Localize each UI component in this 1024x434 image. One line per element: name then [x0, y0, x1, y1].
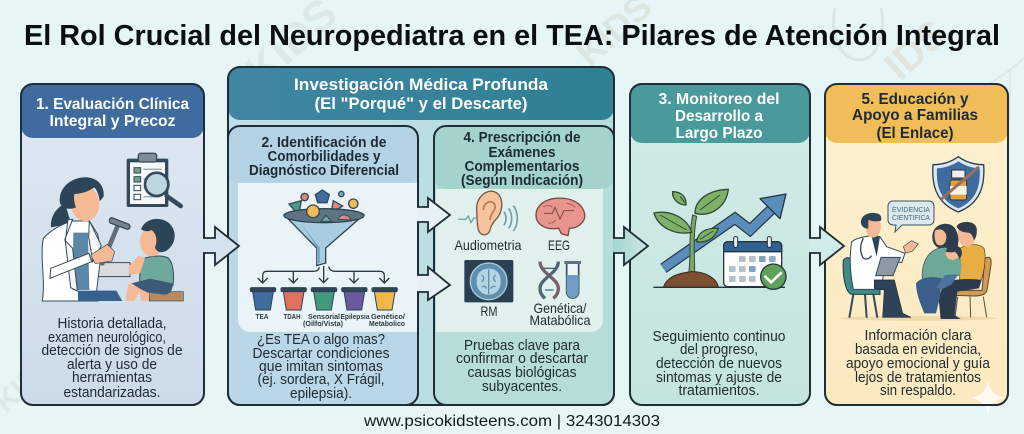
icon: funnel with shapes: [284, 190, 364, 266]
panel 2 body text: que imitan sintomas: [259, 359, 383, 375]
icon: doctor talking with family: [840, 213, 997, 321]
panel 5 body text: lejos de tratamientos: [855, 370, 981, 386]
panel 4 body text: causas biológicas: [468, 365, 576, 381]
bin labels: [256, 312, 406, 328]
icon: shield with crossed-out medicine: [933, 157, 984, 212]
group heading: (El "Porqué" y el Descarte): [314, 94, 528, 113]
panel 5 body text: [846, 328, 991, 399]
panel 4 light area: [436, 189, 603, 332]
icon labels: Audiometria: [454, 237, 522, 253]
panel 4 header: [434, 126, 614, 189]
sparkle mark: [970, 380, 1006, 416]
footer contact: www.psicokidsteens.com | 3243014303: [363, 413, 660, 430]
panel 2 body text: Descartar condiciones: [252, 346, 390, 362]
panel 5 heading: 5. Educación y: [862, 91, 969, 108]
bin labels: TEA: [256, 312, 269, 321]
panel 1 body text: Historia detallada,: [58, 316, 166, 332]
panel 1 body text: alerta y uso de: [67, 357, 157, 373]
panel 5 body text: basada en evidencia,: [855, 342, 981, 358]
watermark: IDS: [877, 11, 956, 89]
panel: investigación médica profunda: [228, 67, 614, 405]
panel 5 body text: apoyo emocional y guía: [846, 356, 991, 372]
panel: 4 prescripción: [434, 126, 614, 405]
panel 1 body text: [42, 316, 182, 401]
group heading: [294, 75, 549, 113]
panel 3 body text: tratamientos.: [678, 383, 760, 399]
icon: brain EEG: [536, 198, 585, 236]
icon: MRI scan: [464, 260, 513, 302]
panel 4 heading: 4. Prescripción de: [464, 130, 580, 146]
panel 1 heading: Integral y Precoz: [50, 113, 176, 130]
panel: 5 educación y apoyo: [825, 84, 1008, 416]
panel 2 heading: Diagnóstico Diferencial: [249, 163, 399, 179]
arrow: panel 2 to examen lower: [417, 267, 450, 300]
panel 3 header: [630, 84, 810, 143]
panel 3 body text: detección de nuevos: [656, 356, 782, 372]
icon: clipboard with magnifier: [127, 153, 181, 207]
panel 3 body text: del progreso,: [680, 342, 758, 358]
panel 4 heading: Exámenes: [488, 145, 556, 161]
panel 1 header: [21, 84, 204, 138]
panel 3 body text: Seguimiento continuo: [652, 329, 786, 345]
panel 1 body text: estandarizadas.: [64, 385, 160, 401]
icon labels: Matabólica: [530, 312, 591, 328]
icon: DNA and test tube: [540, 261, 581, 298]
callout: evidencia científica: [888, 201, 934, 232]
panel 1 body text: detección de signos de: [42, 343, 182, 359]
panel 4 body text: [456, 338, 588, 395]
icon labels: EEG: [548, 237, 570, 253]
panel: 2 comorbilidades: [228, 126, 418, 405]
doctor: [843, 213, 918, 318]
icon labels: Genética/: [534, 300, 587, 316]
icon labels: [454, 237, 591, 328]
arrow: group to panel 3: [613, 227, 648, 265]
panel 4 heading: Complementarios: [464, 159, 580, 175]
soil: [663, 272, 718, 287]
panel 3 body text: sintomas y ajuste de: [656, 370, 782, 386]
bin labels: (Oilfo/Vista): [303, 319, 343, 328]
panel 2 body text: epilepsia).: [290, 386, 352, 402]
icon: doctor: [42, 177, 130, 301]
mother: [916, 224, 958, 313]
panel 4 body text: Pruebas clave para: [464, 338, 581, 354]
icon: ear with sound waves: [458, 191, 517, 235]
arrow: panel 3 to panel 5: [809, 227, 844, 265]
bin labels: Sensorial: [308, 312, 340, 321]
title: El Rol Crucial del Neuropediatra en el TEA: Pilares de Atención Integral: [24, 20, 1000, 52]
callout: evidencia científica: CIENTIFICA: [892, 213, 930, 222]
panel 5 body text: sin respaldo.: [880, 383, 956, 399]
panel 3 heading: Largo Plazo: [676, 125, 763, 142]
panel 2 heading: Comorbilidades y: [268, 149, 380, 165]
arrow: panel 1 to group: [203, 227, 239, 265]
panel 2 header: [228, 126, 418, 183]
panel 3 body text: [652, 329, 786, 399]
panel 5 heading: [852, 91, 978, 142]
panel 3 heading: [658, 91, 780, 142]
panel 5 header: [825, 84, 1008, 143]
panel 1 heading: 1. Evaluación Clínica: [36, 96, 189, 113]
icon: doctor examining child with checklist: [42, 153, 183, 301]
panel 1 body text: herramientas: [72, 370, 152, 386]
bin labels: Epilepsia: [340, 312, 370, 321]
bin labels: Genético/: [371, 312, 406, 321]
bins: [250, 288, 397, 310]
icon: growing plant, rising chart and calendar: [653, 189, 786, 289]
child: [937, 245, 962, 289]
callout: evidencia científica: EVIDENCIA: [892, 205, 930, 214]
panel 2 body text: (ej. sordera, X Frágil,: [258, 372, 384, 388]
panel 4 heading: [461, 130, 583, 189]
panel 1 heading: [36, 96, 189, 130]
arrow: panel 2 to examen upper: [417, 198, 450, 232]
panel 5 heading: Apoyo a Familias: [852, 107, 978, 124]
panel 2 body text: [252, 332, 390, 402]
group heading: Investigación Médica Profunda: [294, 75, 549, 94]
panel 5 body text: Información clara: [864, 328, 972, 344]
icon labels: RM: [480, 303, 498, 319]
panel: 3 monitoreo: [630, 84, 810, 405]
growth arrow: [663, 194, 786, 268]
sorting arrows: [258, 266, 389, 283]
panel 1 body text: examen neurológico,: [48, 330, 166, 346]
panel 4 body text: confirmar o descartar: [456, 351, 588, 367]
calendar: [724, 237, 786, 289]
panel 4 body text: subyacentes.: [482, 379, 562, 395]
group header: [228, 67, 614, 120]
panel 2 heading: [249, 135, 399, 179]
panel 2 white area: [238, 183, 418, 332]
panel 5 heading: (El Enlace): [876, 125, 954, 142]
bin labels: Metabolico: [369, 319, 405, 328]
panel 3 heading: Desarrollo a: [675, 108, 763, 125]
icon: child: [126, 219, 183, 301]
panel 4 heading: (Según Indicación): [461, 173, 583, 189]
bin labels: TDAH: [284, 312, 300, 321]
panel 2 body text: ¿Es TEA o algo mas?: [257, 332, 385, 348]
right chair: [955, 257, 991, 317]
icon: reflex hammer with hand: [91, 218, 130, 264]
panel 3 heading: 3. Monitoreo del: [658, 91, 780, 108]
father: [939, 222, 985, 319]
panel: 1 evaluación clínica: [21, 84, 204, 405]
plant: [654, 189, 728, 273]
panel 2 heading: 2. Identificación de: [262, 135, 386, 151]
